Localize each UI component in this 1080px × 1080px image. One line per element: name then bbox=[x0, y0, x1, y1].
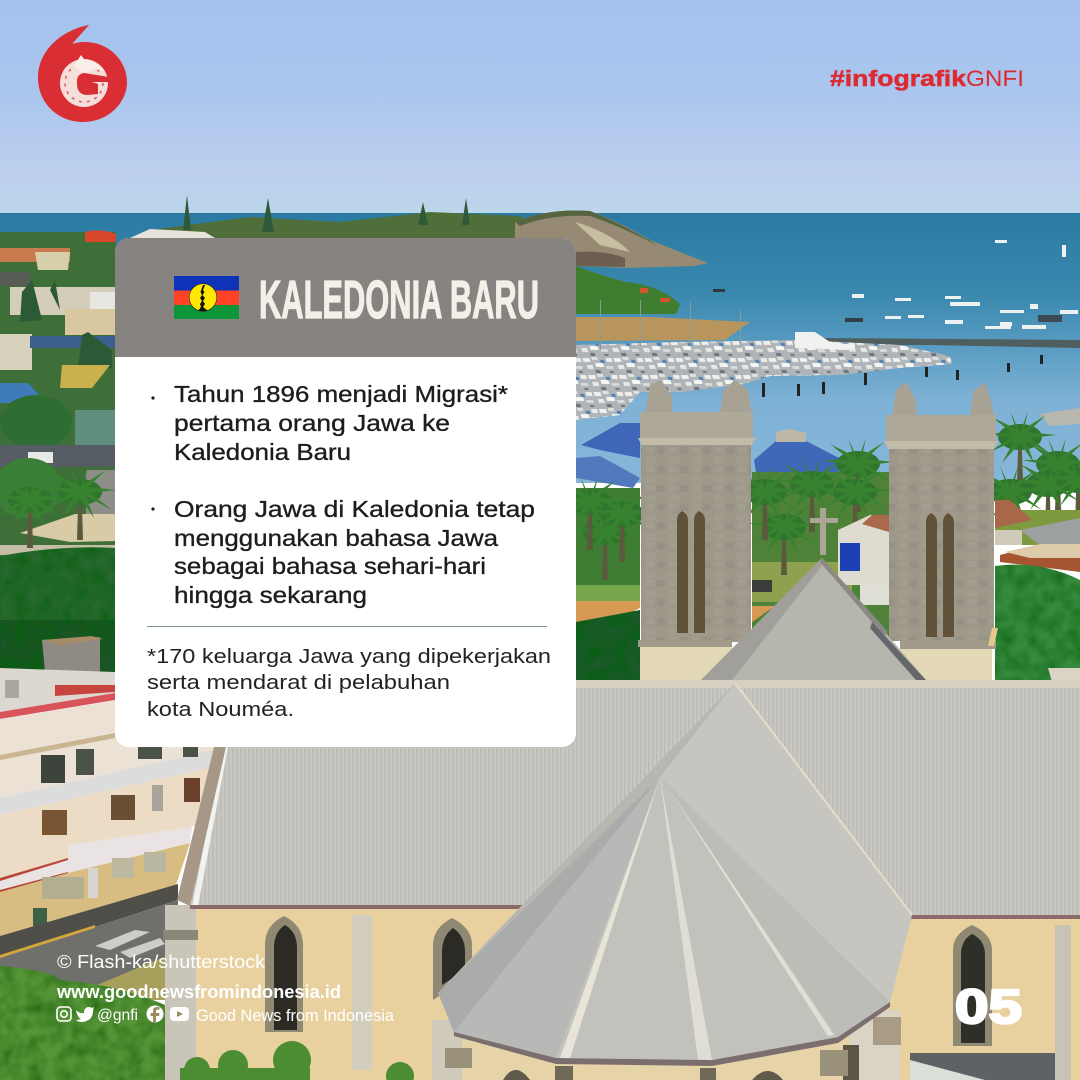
icon: instagram bbox=[57, 1007, 71, 1021]
bullet one: Kaledonia Baru bbox=[174, 439, 351, 465]
apse wall bbox=[432, 1005, 901, 1080]
photo credit: © Flash-ka/shutterstock bbox=[57, 952, 266, 972]
page number: 05 bbox=[955, 981, 1022, 1034]
panel body bbox=[115, 238, 576, 747]
main roof bbox=[177, 680, 1080, 1002]
bullet list bbox=[152, 381, 535, 608]
right cathedral tower bbox=[884, 382, 998, 681]
bullet two: menggunakan bahasa Jawa bbox=[174, 525, 499, 551]
apse roof bbox=[438, 777, 890, 1066]
bullet one: pertama orang Jawa ke bbox=[174, 410, 450, 436]
palms bbox=[554, 411, 1080, 580]
scenery between towers bbox=[576, 472, 889, 680]
central gable roof bbox=[701, 558, 926, 680]
footnote: *170 keluarga Jawa yang dipekerjakan bbox=[147, 645, 551, 668]
heading: KALEDONIA BARU bbox=[259, 270, 539, 330]
website: www.goodnewsfromindonesia.id bbox=[56, 982, 341, 1002]
bullet two: Orang Jawa di Kaledonia tetap bbox=[174, 496, 535, 522]
rooftop hut bbox=[0, 636, 115, 712]
bullet one bbox=[152, 381, 508, 465]
social handle: @gnfi bbox=[97, 1007, 138, 1024]
bottom shrubs bbox=[180, 1041, 414, 1080]
trees below the panel top bbox=[0, 620, 116, 690]
logo letter G bbox=[77, 73, 109, 95]
footnote: kota Nouméa. bbox=[147, 698, 294, 721]
icon: flag of Kanaky bbox=[174, 276, 239, 319]
icon: youtube bbox=[170, 1007, 189, 1021]
street and sidewalk bbox=[0, 884, 178, 1000]
logo red swirl bbox=[38, 25, 127, 122]
page name: Good News from Indonesia bbox=[196, 1007, 395, 1025]
distant headland bbox=[130, 195, 708, 268]
panel header bbox=[115, 238, 576, 357]
icon: facebook bbox=[146, 1006, 164, 1023]
left town strip bbox=[0, 230, 116, 682]
logo eagle head bbox=[74, 55, 104, 73]
logo white ring bbox=[60, 59, 108, 107]
icon: twitter bbox=[76, 1007, 94, 1022]
white building with blue sign bbox=[838, 515, 889, 605]
bullet two bbox=[152, 496, 535, 608]
apartment building bbox=[0, 680, 240, 936]
moored boats bbox=[713, 240, 1078, 329]
bullet two: hingga sekarang bbox=[174, 582, 367, 608]
hashtag label: #infografik bbox=[830, 66, 967, 91]
breakwater bbox=[820, 338, 1080, 348]
right quay bbox=[1040, 408, 1080, 426]
left cathedral tower bbox=[638, 380, 756, 681]
hashtag label: GNFI bbox=[966, 66, 1024, 91]
sky bbox=[0, 0, 1080, 214]
panel: Kaledonia Baru bbox=[115, 238, 576, 747]
logo bbox=[38, 25, 127, 122]
footnote bbox=[147, 645, 551, 721]
green point and brown field bbox=[576, 266, 750, 341]
marina bbox=[576, 300, 1043, 420]
bullet one: Tahun 1896 menjadi Migrasi* bbox=[174, 381, 508, 407]
bullet two: sebagai bahasa sehari-hari bbox=[174, 553, 486, 579]
footer credits bbox=[56, 952, 395, 1025]
right side scenery bbox=[995, 500, 1080, 682]
blue roof buildings bbox=[576, 423, 843, 488]
bottom left tree bbox=[0, 966, 165, 1080]
cross bbox=[810, 508, 838, 555]
footnote: serta mendarat di pelabuhan bbox=[147, 671, 450, 694]
sea bbox=[0, 213, 1080, 483]
walls bbox=[163, 905, 1080, 1080]
